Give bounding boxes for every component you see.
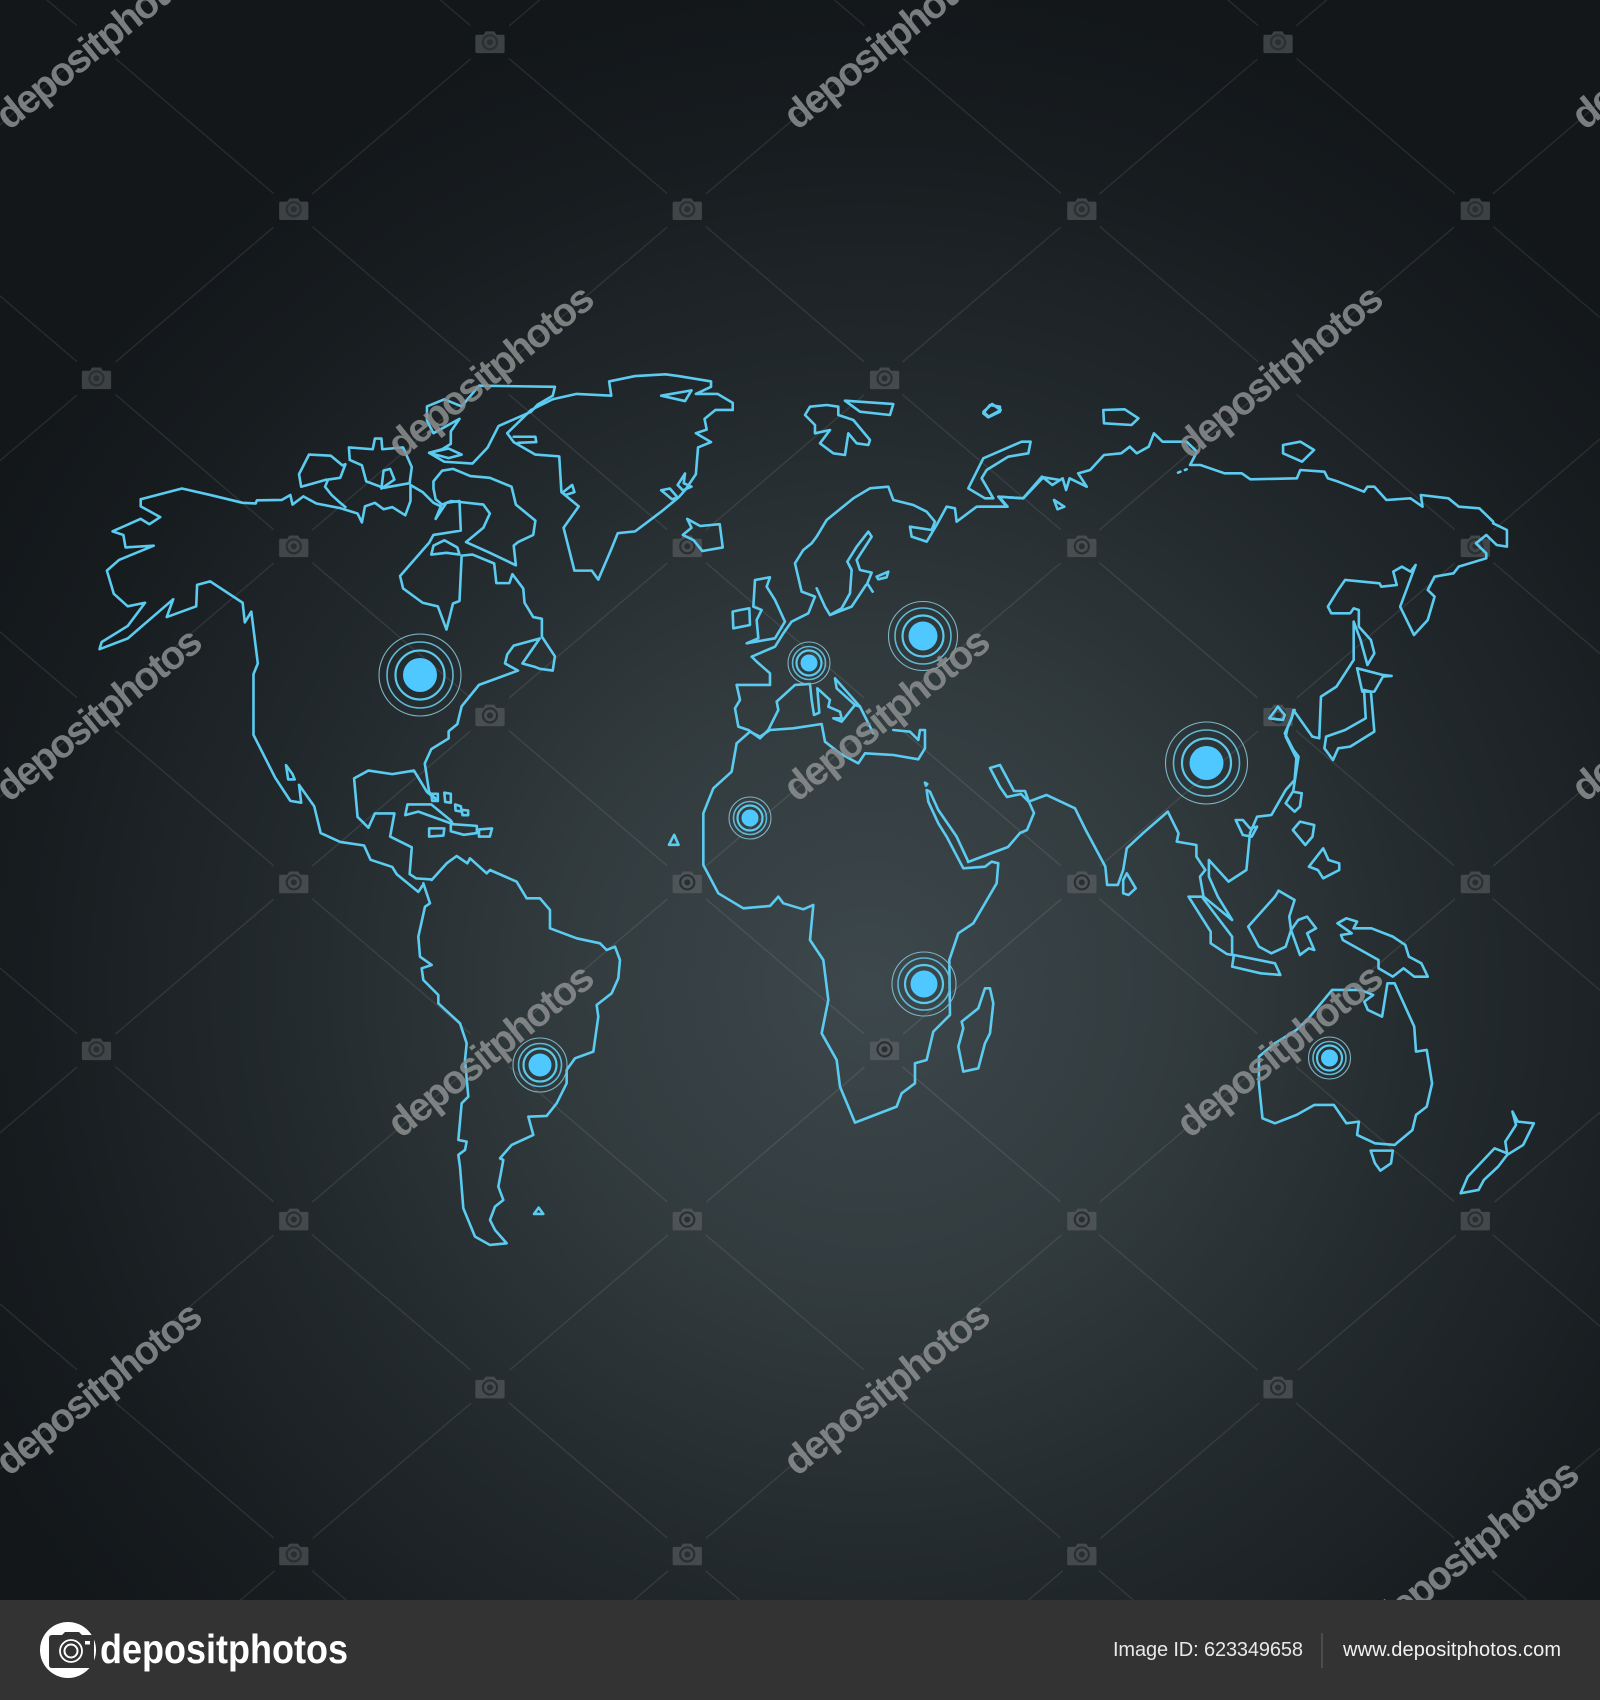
diagonal watermarks: depositphotos: [775, 619, 999, 810]
Tasmania: [1371, 1151, 1393, 1171]
pulse: Eastern Europe: [888, 602, 958, 670]
Iceland: [683, 519, 723, 551]
footer logo icon: [40, 1622, 96, 1678]
Europe and Arctic Atlantic islands: [733, 401, 1060, 738]
South America: [418, 856, 620, 1245]
diagonal watermarks: depositphotos: [1364, 1451, 1588, 1642]
North America and Arctic islands: [100, 374, 733, 892]
New Zealand: [1461, 1112, 1534, 1193]
diagonal watermarks: depositphotos: [379, 955, 603, 1146]
Borneo: [1248, 891, 1295, 953]
Sulawesi: [1291, 917, 1316, 955]
watermark camera icons: [82, 31, 1490, 1565]
footer separator: [1322, 1633, 1323, 1668]
Greenland: [507, 374, 733, 580]
Japan: [1357, 668, 1392, 692]
diagonal watermarks: depositphotos: [1168, 276, 1392, 467]
world map outline: [100, 374, 1534, 1245]
Australia: [1259, 983, 1432, 1145]
pulse: East Africa: [892, 952, 956, 1016]
pulse: West Africa: [729, 797, 771, 839]
diagonal watermarks: depositphotos: [379, 276, 603, 467]
image id: Image ID: 623349658: [1113, 1639, 1303, 1661]
pulse: China: [1166, 722, 1248, 804]
website url: www.depositphotos.com: [1342, 1639, 1561, 1661]
Java: [1232, 955, 1280, 975]
Northern Asia, Kamchatka, Korea: [980, 404, 1507, 790]
location pulses: [379, 602, 1350, 1092]
diagonal watermarks: depositphotos: [1168, 955, 1392, 1146]
pulse: Australia: [1308, 1037, 1350, 1079]
diagonal watermarks: depositphotos: [775, 1293, 999, 1484]
Africa and Madagascar: [703, 724, 998, 1123]
Arabia and Persian Gulf: [968, 765, 1034, 862]
Baja lagoon: [286, 765, 295, 779]
pulse: South America: [513, 1038, 567, 1092]
Sumatra: [1189, 897, 1232, 955]
New Guinea: [1337, 918, 1428, 977]
pulse: Western Europe: [788, 642, 830, 684]
Svalbard: [805, 405, 870, 455]
footer logo wordmark: depositphotos: [100, 1626, 348, 1672]
Caribbean islands: [405, 793, 679, 845]
Novaya Zemlya: [968, 442, 1031, 498]
South and Southeast Asia, Oceania: [1029, 710, 1534, 1193]
footer bar: [0, 1600, 1600, 1700]
pulse: North America: [379, 634, 461, 716]
